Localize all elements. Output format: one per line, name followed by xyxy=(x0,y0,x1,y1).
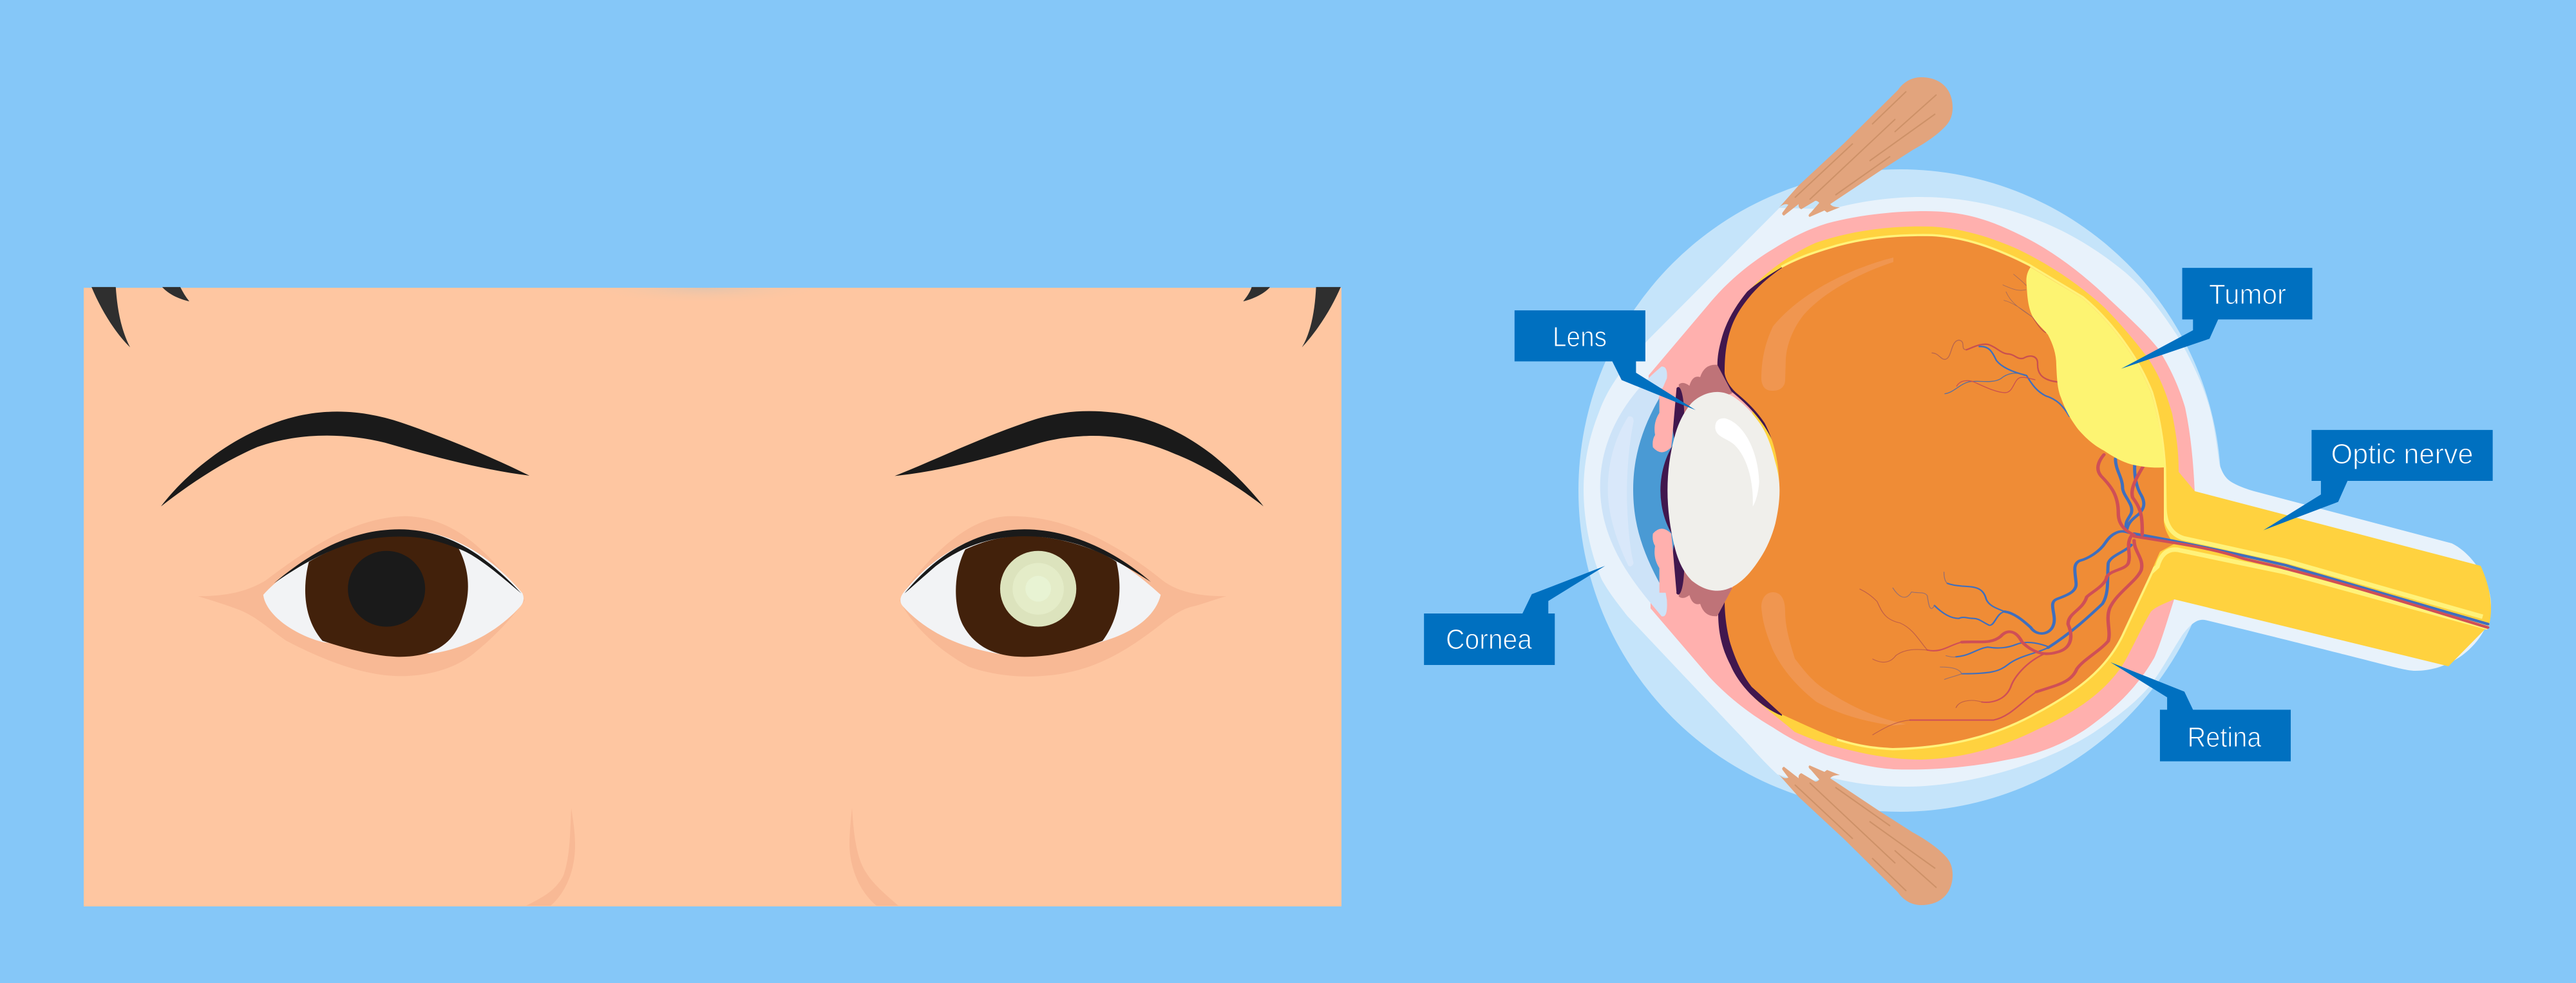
callout: Lens: Lens xyxy=(1553,321,1607,353)
callout: Tumor xyxy=(2121,268,2313,369)
callout: Retina: Retina xyxy=(2187,722,2262,753)
cornea, iris, ciliary body and lens xyxy=(1600,365,1779,617)
callout: Lens xyxy=(1515,310,1696,410)
retinal vessels near optic disc xyxy=(1860,454,2488,735)
panel: eyeball cross-section xyxy=(1578,77,2491,905)
callout: Cornea: Cornea xyxy=(1446,624,1532,655)
callout: Optic nerve xyxy=(2264,430,2493,530)
eyeball layers xyxy=(1578,169,2491,812)
muscle: superior rectus xyxy=(1779,77,1953,217)
retinal vessels near tumor xyxy=(1932,274,2069,417)
face skin xyxy=(84,288,1341,906)
lens xyxy=(1667,392,1779,591)
panel: face with two eyes xyxy=(84,287,1341,906)
right eye with cataract glow, brow and hair xyxy=(895,287,1341,677)
callout: Cornea xyxy=(1424,566,1605,665)
tumor xyxy=(2027,267,2165,467)
left eye with brow and hair xyxy=(91,287,529,676)
nose shadows xyxy=(526,808,898,906)
callout: Tumor: Tumor xyxy=(2209,279,2286,310)
callout: Optic nerve: Optic nerve xyxy=(2331,438,2473,470)
muscle: inferior rectus xyxy=(1779,765,1953,905)
callout: Retina xyxy=(2110,662,2291,762)
